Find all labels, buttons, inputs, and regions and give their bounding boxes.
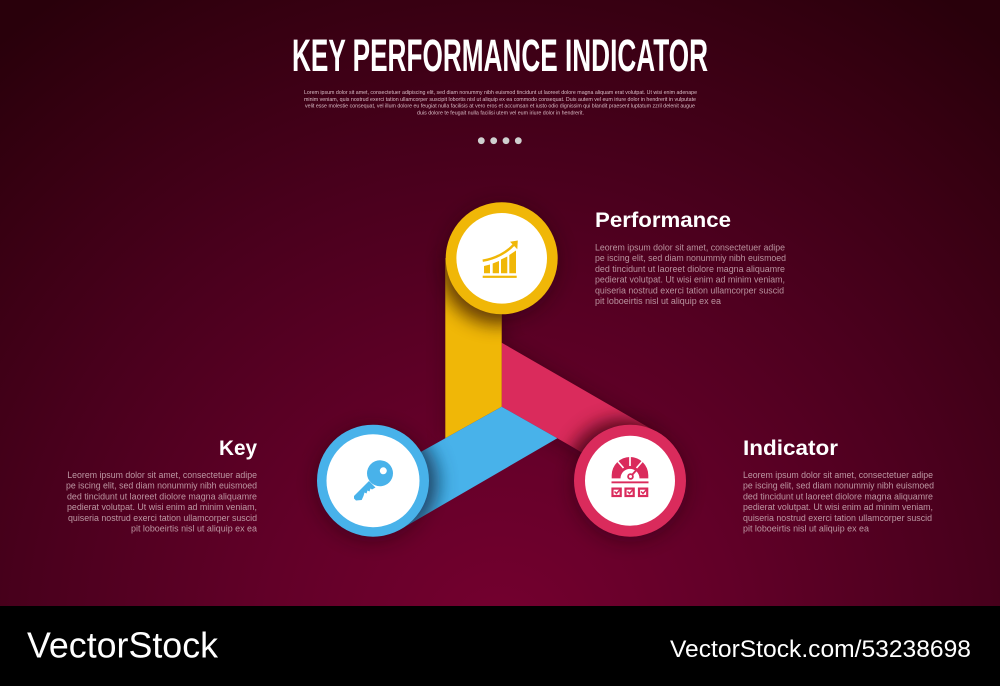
text block: key: Leorem ipsum dolor sit amet, consectetuer adipe — [67, 470, 257, 481]
text block: key: quiseria nostrud exerci tation ullamcorper suscid — [68, 513, 257, 524]
text block: key: pe iscing elit, sed diam nonummiy nibh euismoed — [66, 481, 257, 492]
shadow on blue band — [405, 443, 450, 526]
shadow on red band — [562, 408, 651, 452]
yellow band — [445, 258, 502, 438]
node: key — [315, 425, 431, 542]
heading: key: Key — [219, 437, 257, 460]
text block: performance: pe iscing elit, sed diam nonummiy nibh euismoed — [595, 253, 786, 264]
text block: key — [66, 470, 258, 534]
pagination dots — [478, 137, 522, 144]
heading: indicator: Indicator — [743, 437, 838, 460]
blue band — [373, 407, 557, 529]
node: indicator — [572, 425, 688, 542]
text block: performance: pedierat volutpat. Ut wisi enim ad minim veniam, — [595, 275, 785, 286]
text block: key: pit loboeirtis nisl ut aliquip ex ea — [131, 524, 258, 534]
diagram: three connected bands — [401, 258, 652, 529]
footer logo text: VectorStock — [27, 624, 219, 666]
intro text block: minim veniam, quis nostrud exerci tation ullamcorper suscipit lobortis nisl ut aliquip ex ea commodo consequat. Duis autem vel eum iriure dolor in hendrerit in vulputate — [304, 97, 696, 103]
footer url text: VectorStock.com/53238698 — [670, 636, 971, 663]
text block: key: pedierat volutpat. Ut wisi enim ad minim veniam, — [67, 502, 257, 513]
intro text block: Lorem ipsum dolor sit amet, consectetuer adipiscing elit, sed diam nonummy nibh euismod tincidunt ut laoreet dolore magna aliquam erat volutpat. Ut wisi enim adenape — [304, 90, 697, 96]
text block: performance: quiseria nostrud exerci tation ullamcorper suscid — [595, 285, 784, 296]
node: performance — [444, 202, 560, 320]
text block: performance: ded tincidunt ut laoreet diolore magna aliquamre — [595, 264, 785, 275]
text block: indicator: ded tincidunt ut laoreet diolore magna aliquamre — [743, 491, 933, 502]
intro text block — [304, 90, 697, 116]
footer bar — [0, 606, 1000, 686]
icon: growth chart — [483, 240, 518, 278]
intro text block: duis dolore te feugait nulla facilisi utem vel eum iriure dolor in hendrerit. — [417, 110, 584, 116]
band shadow — [445, 258, 658, 470]
text block: performance: pit loboeirtis nisl ut aliquip ex ea — [595, 296, 722, 307]
text block: performance: Leorem ipsum dolor sit amet, consectetuer adipe — [595, 242, 785, 254]
red band — [502, 343, 658, 481]
text block: indicator: pedierat volutpat. Ut wisi enim ad minim veniam, — [743, 502, 933, 513]
text block: indicator: Leorem ipsum dolor sit amet, consectetuer adipe — [743, 470, 933, 481]
text block: indicator: pit loboeirtis nisl ut aliquip ex ea — [743, 524, 870, 534]
title: KEY PERFORMANCE INDICATOR — [292, 30, 708, 81]
text block: key: ded tincidunt ut laoreet diolore magna aliquamre — [67, 491, 257, 502]
text block: performance — [595, 242, 786, 307]
heading: performance: Performance — [595, 209, 731, 232]
shadow on yellow band — [446, 258, 502, 337]
intro text block: velit esse molestie consequat, vel illum dolore eu feugiat nulla facilisis at vero eros et accumsan et iusto odio dignissim qui blandit praesent luptatum zzril delenit augue — [305, 104, 695, 110]
icon: gauge with checkboxes — [612, 455, 648, 496]
text block: indicator — [743, 470, 934, 534]
text block: indicator: quiseria nostrud exerci tation ullamcorper suscid — [743, 513, 932, 524]
text block: indicator: pe iscing elit, sed diam nonummiy nibh euismoed — [743, 481, 934, 492]
icon: key — [354, 460, 393, 500]
